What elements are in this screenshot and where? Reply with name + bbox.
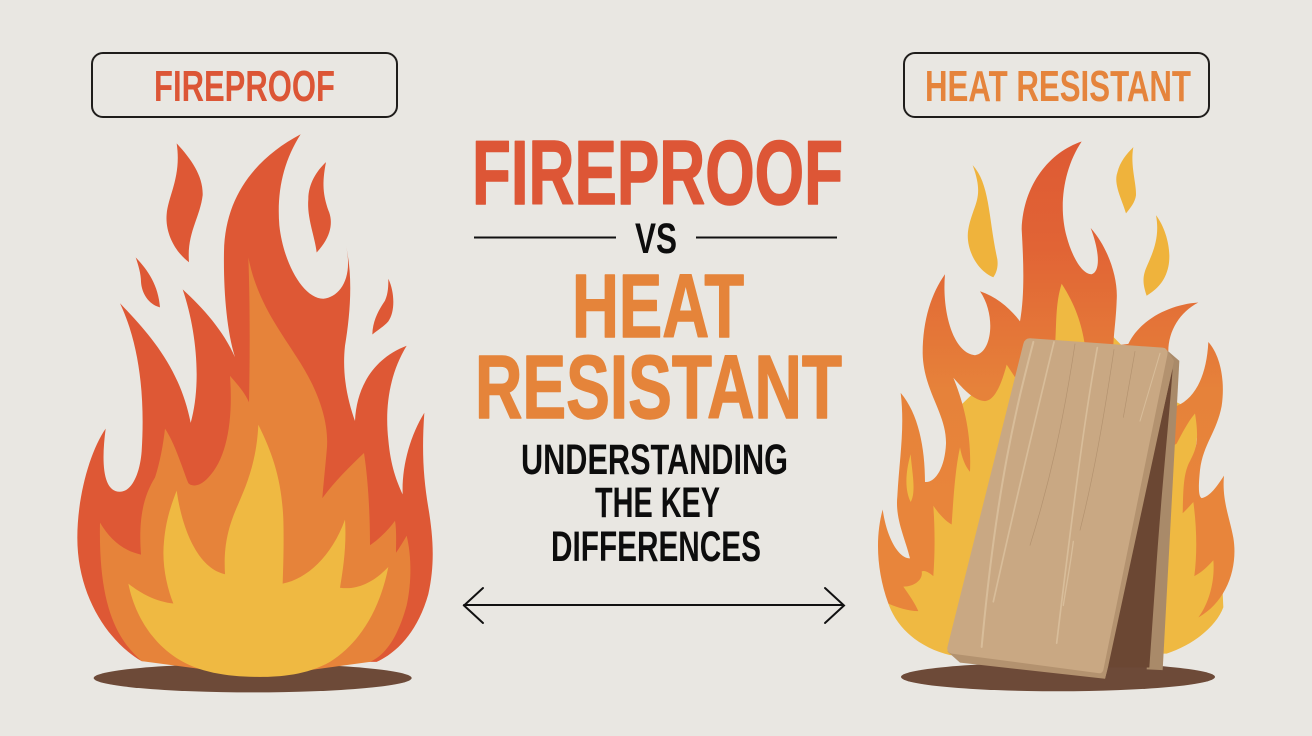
title: heat resistant: RESISTANT: [475, 338, 842, 438]
flame orange layer: [878, 141, 1234, 617]
flame yellow base: [888, 282, 1223, 655]
board gap: [1105, 368, 1173, 668]
wood grain: [982, 342, 1160, 647]
label: fireproof: [92, 53, 397, 117]
board side edge: [1101, 350, 1174, 679]
title: fireproof: FIREPROOF: [472, 123, 843, 224]
vs divider: VS: [635, 215, 677, 263]
subtitle: DIFFERENCES: [551, 523, 761, 571]
centre flame tongue: [1055, 284, 1085, 346]
back board: [1147, 351, 1179, 670]
board front face: [947, 338, 1168, 673]
flame red outer layer: [77, 134, 433, 662]
board bottom edge: [947, 651, 1108, 679]
illustration: heat resistant board in flames: [878, 141, 1234, 691]
flame yellow core: [128, 425, 388, 677]
board shadow: [901, 663, 1215, 691]
subtitle: THE KEY: [595, 479, 720, 527]
subtitle: [521, 436, 788, 571]
title: heat resistant: HEAT: [572, 257, 744, 357]
subtitle: UNDERSTANDING: [521, 436, 788, 484]
title: heat resistant: [475, 257, 842, 438]
label: heat resistant: HEAT RESISTANT: [925, 62, 1191, 111]
label: fireproof: FIREPROOF: [154, 62, 335, 111]
flame shadow: [94, 664, 412, 692]
small yellow tongue: [906, 454, 914, 502]
flame sparks: [136, 143, 393, 334]
illustration: fireproof flame: [77, 134, 433, 692]
flame orange middle layer: [100, 257, 410, 677]
label: heat resistant: [904, 53, 1209, 117]
flame sparks: [968, 147, 1169, 296]
double-headed arrow: [464, 588, 844, 623]
